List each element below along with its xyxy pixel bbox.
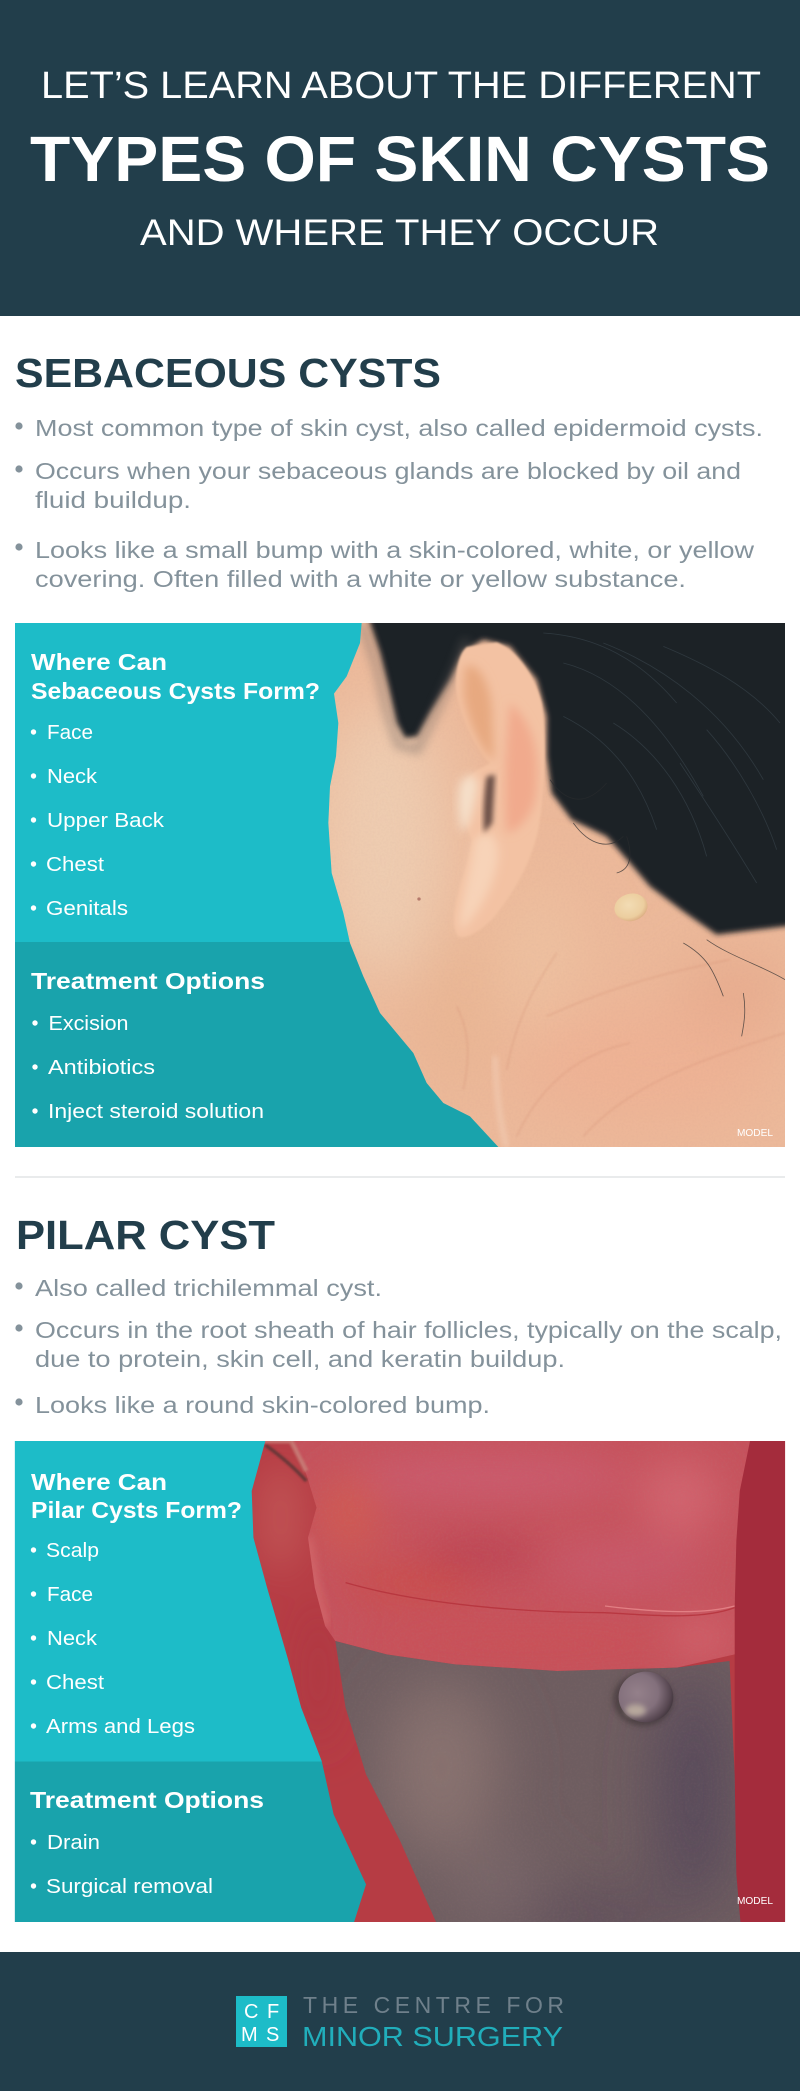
model caption: MODEL	[737, 1896, 773, 1907]
cyst bump	[614, 894, 648, 922]
teal panel background	[15, 1441, 366, 1922]
pilar description bullets: due to protein, skin cell, and keratin buildup.	[35, 1346, 565, 1372]
list: sebaceous treatment options: Antibiotics	[48, 1057, 155, 1079]
list: where sebaceous cysts form: Chest	[46, 854, 104, 876]
list: where pilar cysts form: Neck	[47, 1628, 98, 1650]
sebaceous description bullets: covering. Often filled with a white or yellow substance.	[35, 566, 686, 592]
title line 1: LET’S LEARN ABOUT THE DIFFERENT	[41, 65, 761, 107]
list: sebaceous treatment options: Inject steroid solution	[48, 1101, 264, 1123]
title line 3: AND WHERE THEY OCCUR	[140, 212, 659, 253]
cyst bump	[613, 1672, 673, 1726]
pilar description bullets: Also called trichilemmal cyst.	[35, 1275, 382, 1301]
footer band	[0, 1952, 800, 2091]
panel: sebaceous cysts photo and lists	[15, 596, 800, 1147]
list: where pilar cysts form	[31, 1469, 242, 1738]
list: where pilar cysts form: Arms and Legs	[46, 1716, 195, 1738]
list: sebaceous treatment options: Excision	[48, 1013, 128, 1035]
bare arm	[332, 1641, 741, 1934]
sebaceous description bullets: fluid buildup.	[35, 487, 191, 513]
list: where pilar cysts form: Scalp	[46, 1540, 99, 1562]
logo mark: S	[266, 2024, 279, 2046]
list: where sebaceous cysts form: Upper Back	[47, 810, 165, 832]
list: where sebaceous cysts form: Face	[47, 722, 93, 744]
photo: arm with pilar cyst	[243, 1441, 785, 1934]
panel: pilar cyst photo and lists	[15, 1441, 785, 1934]
teal panel background	[15, 623, 498, 1147]
logo wordmark	[302, 1992, 564, 2052]
logo mark: F	[267, 2001, 279, 2023]
logo wordmark: MINOR SURGERY	[302, 2021, 563, 2052]
list: sebaceous treatment options: Treatment Options	[31, 968, 265, 994]
list: where sebaceous cysts form: Sebaceous Cysts Form?	[31, 678, 320, 704]
header banner	[0, 0, 800, 316]
shirt sleeve	[264, 1441, 762, 1674]
logo mark: C	[244, 2001, 258, 2023]
list: sebaceous treatment options	[31, 968, 265, 1123]
list: where sebaceous cysts form	[31, 649, 320, 920]
list: pilar treatment options: Treatment Options	[30, 1787, 264, 1813]
pilar description bullets: Looks like a round skin-colored bump.	[35, 1392, 490, 1418]
pilar description bullets: Occurs in the root sheath of hair follicles, typically on the scalp,	[35, 1317, 782, 1343]
list: where sebaceous cysts form: Where Can	[31, 649, 167, 675]
neck wrinkles	[457, 953, 785, 1136]
list: pilar treatment options	[30, 1787, 264, 1898]
logo wordmark: THE CENTRE FOR	[303, 1992, 564, 2018]
section heading: pilar cyst: PILAR CYST	[16, 1212, 275, 1258]
sebaceous description bullets	[15, 415, 763, 592]
list: where pilar cysts form: Chest	[46, 1672, 104, 1694]
list: where sebaceous cysts form: Neck	[47, 766, 98, 788]
list: where pilar cysts form: Where Can	[31, 1469, 167, 1495]
section heading: sebaceous cysts: SEBACEOUS CYSTS	[15, 350, 441, 396]
list: where pilar cysts form: Pilar Cysts Form?	[31, 1497, 242, 1523]
list: where sebaceous cysts form: Genitals	[46, 898, 128, 920]
sebaceous description bullets: Looks like a small bump with a skin-colored, white, or yellow	[35, 537, 754, 563]
sebaceous description bullets: Occurs when your sebaceous glands are blocked by oil and	[35, 458, 741, 484]
logo mark	[236, 1996, 287, 2047]
main title: TYPES OF SKIN CYSTS	[30, 123, 770, 195]
pilar description bullets	[15, 1275, 782, 1418]
list: pilar treatment options: Drain	[47, 1832, 100, 1854]
photo: neck with sebaceous cyst	[328, 623, 785, 1147]
ear	[454, 642, 545, 937]
logo mark: M	[241, 2024, 258, 2046]
model caption: MODEL	[737, 1128, 773, 1139]
hair	[362, 596, 800, 1036]
sebaceous description bullets: Most common type of skin cyst, also called epidermoid cysts.	[35, 415, 763, 441]
list: where pilar cysts form: Face	[47, 1584, 93, 1606]
list: pilar treatment options: Surgical removal	[46, 1876, 213, 1898]
